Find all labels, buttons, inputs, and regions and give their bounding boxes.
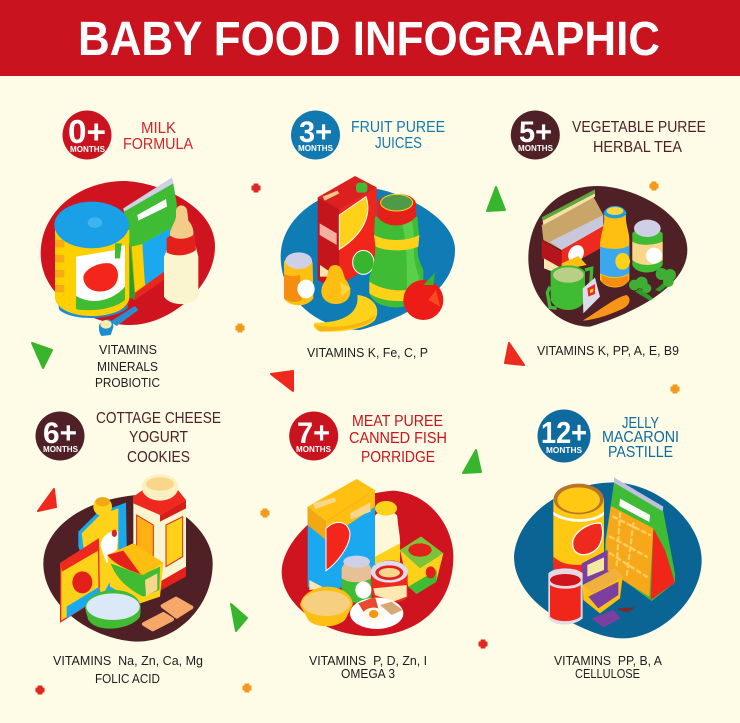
vitamins text: VITAMINS bbox=[99, 342, 157, 357]
badge: 12+ months: 12+ bbox=[541, 415, 587, 450]
heading: jelly macaroni pastille bbox=[602, 415, 679, 461]
badge: 6+ months bbox=[36, 412, 84, 460]
badge: 0+ months: 0+ bbox=[68, 113, 106, 150]
vitamins text: OMEGA 3 bbox=[341, 666, 395, 681]
vitamins text: VITAMINS K, Fe, C, P bbox=[307, 345, 428, 360]
vitamins text: VITAMINS PP, B, A bbox=[554, 653, 662, 668]
vitamins text: PROBIOTIC bbox=[95, 375, 160, 390]
panel: 12+ months bbox=[514, 410, 702, 681]
heading: meat puree canned fish porridge bbox=[349, 413, 447, 466]
illustration: tea box, bottle, jar, cup, broccoli, carrot bbox=[528, 186, 687, 327]
badge: 3+ months: 3+ bbox=[299, 116, 332, 149]
heading: vegetable puree herbal tea: HERBAL TEA bbox=[593, 139, 682, 156]
heading: vegetable puree herbal tea: VEGETABLE PUREE bbox=[572, 119, 706, 136]
heading: cottage cheese yogurt cookies: COTTAGE CHEESE bbox=[96, 410, 221, 427]
badge: 3+ months: MONTHS bbox=[298, 144, 334, 153]
heading: fruit puree juices bbox=[351, 119, 445, 152]
heading: jelly macaroni pastille: JELLY bbox=[622, 415, 659, 432]
vitamins text: VITAMINS P, D, Zn, I bbox=[309, 653, 427, 668]
illustration: yogurt bottle, pouch, boxes, cheese bowl, cookies bbox=[43, 474, 213, 642]
vitamins text: FOLIC ACID bbox=[95, 671, 160, 686]
vitamins text: VITAMINS Na, Zn, Ca, Mg bbox=[53, 653, 203, 668]
heading: cottage cheese yogurt cookies: YOGURT bbox=[129, 429, 188, 446]
title banner bbox=[0, 0, 740, 76]
badge: 6+ months: MONTHS bbox=[43, 445, 79, 454]
illustration: juice box, bottle, jar, pear, banana, apple bbox=[281, 176, 455, 332]
panel: 3+ months bbox=[281, 110, 455, 360]
panel: 0+ months bbox=[41, 110, 215, 390]
illustration: milk formula can, pouch, bottle bbox=[41, 177, 215, 336]
vitamins text bbox=[53, 653, 203, 686]
badge: 5+ months: MONTHS bbox=[518, 144, 554, 153]
vitamins text: VITAMINS K, PP, A, E, B9 bbox=[537, 343, 679, 358]
badge: 12+ months: MONTHS bbox=[546, 446, 583, 455]
title banner: BABY FOOD INFOGRAPHIC bbox=[78, 13, 660, 66]
panel: 6+ months bbox=[36, 410, 221, 686]
badge: 3+ months bbox=[291, 110, 340, 160]
badge: 7+ months bbox=[289, 412, 338, 460]
heading: fruit puree juices: FRUIT PUREE bbox=[351, 119, 445, 136]
panel: 5+ months bbox=[511, 110, 706, 358]
badge: 0+ months bbox=[62, 110, 112, 160]
heading: vegetable puree herbal tea bbox=[572, 119, 706, 156]
heading: cottage cheese yogurt cookies: COOKIES bbox=[127, 449, 190, 466]
heading: milk formula bbox=[123, 120, 193, 153]
heading: meat puree canned fish porridge: CANNED FISH bbox=[349, 430, 447, 447]
heading: fruit puree juices: JUICES bbox=[375, 135, 422, 152]
vitamins text bbox=[554, 653, 662, 681]
heading: meat puree canned fish porridge: PORRIDGE bbox=[361, 449, 435, 466]
heading: jelly macaroni pastille: MACARONI bbox=[602, 429, 679, 446]
illustration: cereal box, milk, jar, can, cheese tin, plate, bowl bbox=[282, 479, 453, 636]
badge: 5+ months bbox=[511, 110, 560, 160]
badge: 12+ months bbox=[538, 410, 590, 462]
heading: meat puree canned fish porridge: MEAT PUREE bbox=[352, 413, 443, 430]
vitamins text bbox=[95, 342, 160, 390]
heading: milk formula: MILK bbox=[141, 120, 176, 137]
badge: 7+ months: 7+ bbox=[297, 417, 330, 450]
badge: 7+ months: MONTHS bbox=[296, 445, 332, 454]
decorative triangles and plus marks bbox=[32, 182, 679, 694]
panel: 7+ months bbox=[282, 412, 453, 681]
vitamins text: MINERALS bbox=[97, 359, 158, 374]
vitamins text bbox=[309, 653, 427, 681]
heading: milk formula: FORMULA bbox=[123, 136, 193, 153]
badge: 0+ months: MONTHS bbox=[70, 145, 106, 154]
badge: 6+ months: 6+ bbox=[43, 417, 77, 450]
badge: 5+ months: 5+ bbox=[519, 116, 552, 149]
heading: jelly macaroni pastille: PASTILLE bbox=[608, 444, 673, 461]
heading: cottage cheese yogurt cookies bbox=[96, 410, 221, 466]
illustration: can, macaroni bag, glass, small box bbox=[514, 477, 702, 638]
vitamins text: CELLULOSE bbox=[575, 666, 640, 681]
